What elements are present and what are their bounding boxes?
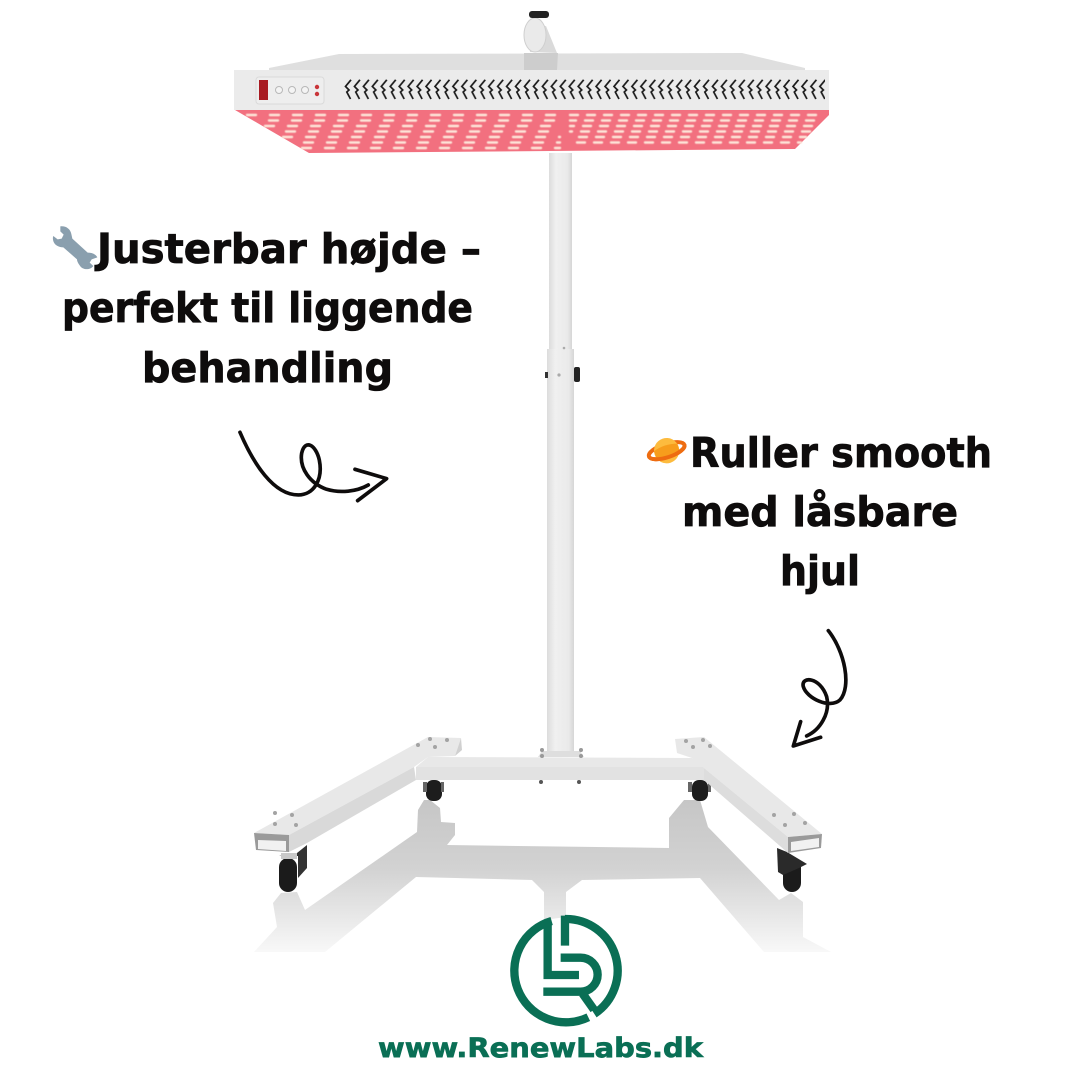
front left caster xyxy=(279,845,307,892)
icon: ringed planet xyxy=(645,433,688,468)
text xyxy=(682,429,992,595)
text: perfekt til liggende xyxy=(62,284,473,332)
R leg xyxy=(583,994,594,1010)
LED light panel head xyxy=(234,11,829,153)
LED lenses xyxy=(247,115,824,148)
callout: rolling wheels xyxy=(645,429,992,595)
text: behandling xyxy=(142,344,393,392)
inner left caster xyxy=(423,780,444,801)
arrow: toward the wheels xyxy=(793,631,846,746)
logo: RenewLabs emblem xyxy=(514,916,618,1022)
top plate xyxy=(269,53,805,72)
stand pole xyxy=(545,153,580,757)
floor shadow of the stand xyxy=(254,800,831,952)
text: Ruller smooth xyxy=(690,429,992,477)
front face xyxy=(234,70,829,110)
R bowl xyxy=(543,958,598,992)
icon: wrench xyxy=(53,226,97,269)
right arm xyxy=(675,737,822,853)
left arm xyxy=(254,737,462,852)
arrow: toward the pole xyxy=(240,432,387,501)
pole mounting plate xyxy=(538,748,584,784)
right ring arc xyxy=(565,919,618,1014)
pivot mount and knob xyxy=(524,11,558,70)
text: hjul xyxy=(780,547,860,595)
front right caster xyxy=(777,848,807,892)
left ring arc xyxy=(514,921,588,1022)
control panel xyxy=(256,77,324,104)
inner right caster xyxy=(688,780,711,801)
red LED surface xyxy=(235,110,829,153)
callout: adjustable height xyxy=(53,225,481,392)
text: Justerbar højde – xyxy=(94,225,481,273)
L stem and foot xyxy=(548,925,579,975)
ventilation slots xyxy=(343,79,825,100)
text xyxy=(62,225,481,392)
text: med låsbare xyxy=(682,488,958,536)
wheeled base xyxy=(254,737,822,892)
R stem xyxy=(552,916,577,946)
website address: www.RenewLabs.dk xyxy=(378,1033,704,1064)
cross bar xyxy=(416,757,704,780)
